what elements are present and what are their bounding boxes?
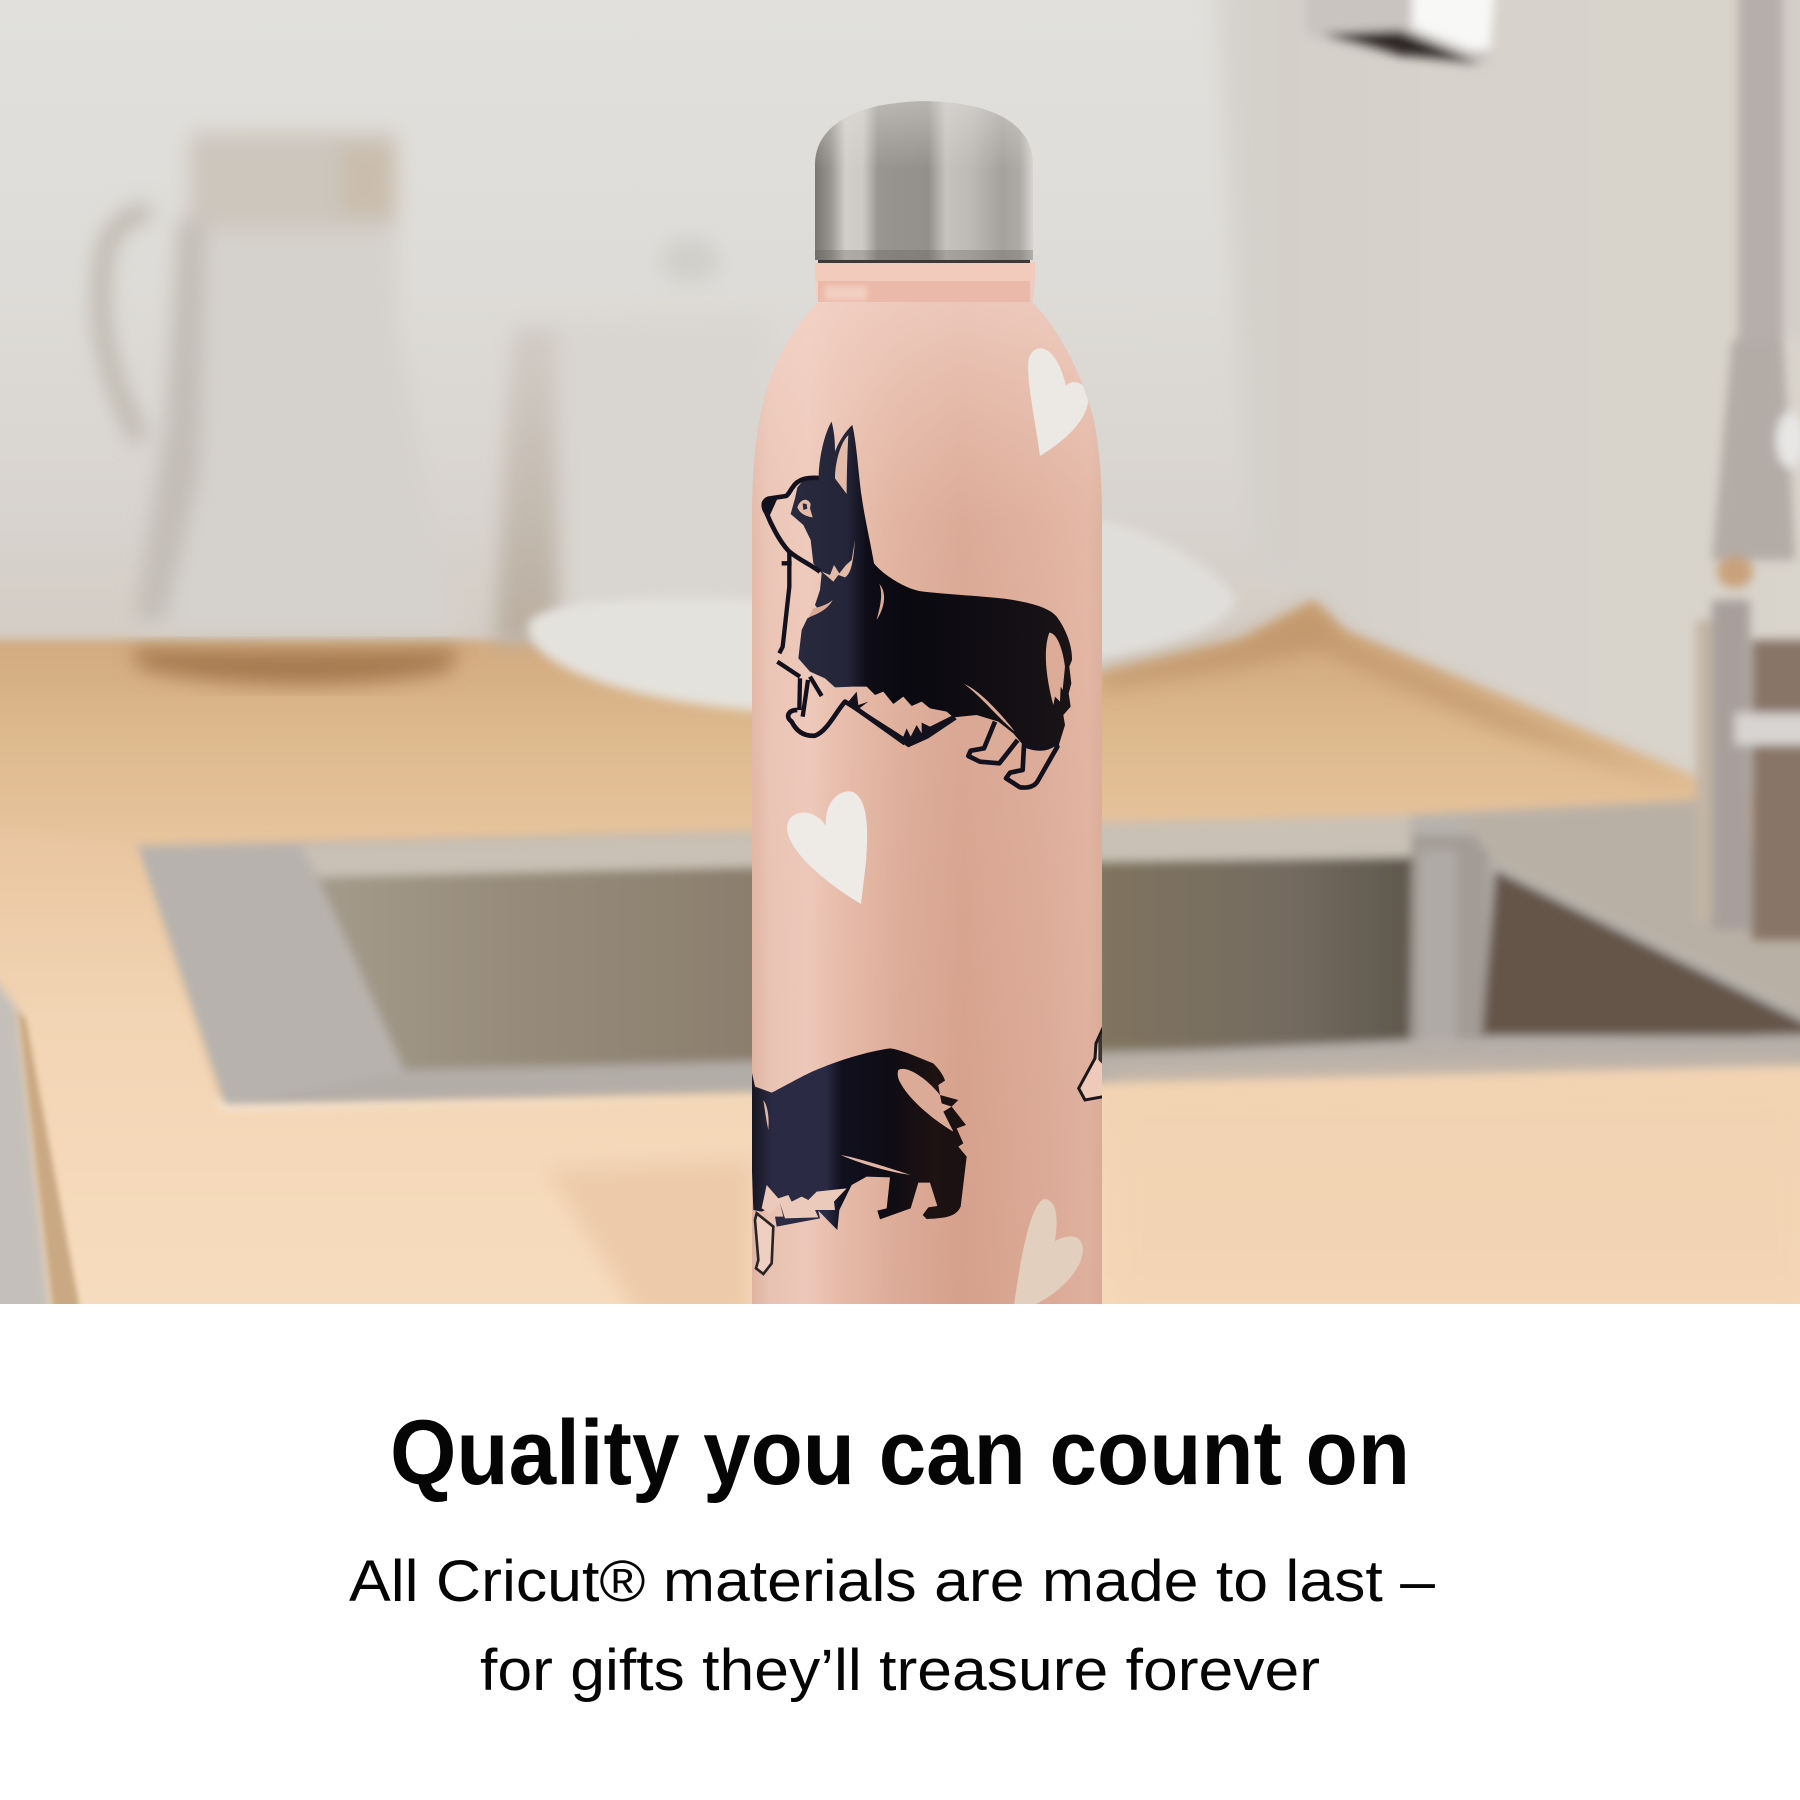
panel: kitchen photo — [0, 0, 1800, 1320]
divider — [1410, 835, 1490, 1040]
sink — [135, 800, 1800, 1107]
back wall — [0, 0, 1488, 688]
counter dark edge — [18, 1010, 82, 1320]
bottle cap — [815, 101, 1033, 260]
heart top right — [1028, 348, 1088, 456]
cap bottom edge — [815, 250, 1033, 260]
front wood — [0, 830, 1800, 1320]
cap top sheen — [815, 101, 1033, 172]
belly fur — [762, 1185, 847, 1218]
blurred kitchen background — [0, 0, 1800, 1320]
wood darker patch — [559, 1162, 752, 1304]
nose — [762, 497, 778, 515]
heart bottom right — [1014, 1199, 1083, 1305]
right wall — [1218, 0, 1800, 772]
left basin — [318, 866, 800, 1072]
bottle artwork — [751, 348, 1107, 1305]
sink deck — [135, 800, 1800, 1107]
shoulder patches — [877, 584, 884, 620]
faucet — [1696, 0, 1800, 940]
counter side edge — [0, 960, 52, 1320]
body silhouette — [791, 422, 1072, 753]
body text — [349, 1549, 1436, 1703]
eye patch — [797, 500, 813, 517]
white jug — [84, 126, 406, 618]
white container — [488, 325, 586, 650]
water bottle — [751, 101, 1107, 1305]
bottle neck ring — [815, 263, 1035, 282]
body silhouette — [751, 1048, 967, 1230]
paw — [755, 1213, 773, 1274]
front paw and belly line — [788, 702, 905, 743]
bottom rim — [464, 1030, 1800, 1072]
wooden counter back — [0, 600, 1800, 1100]
sink rim back — [300, 815, 1410, 877]
neck shade — [818, 281, 1030, 302]
corgi bottom — [751, 1048, 967, 1274]
hind leg far — [1006, 743, 1057, 788]
right deck — [1476, 808, 1690, 850]
body line 1: All Cricut® materials are made to last – — [349, 1549, 1436, 1614]
tail patch — [898, 1069, 953, 1132]
neck highlight — [825, 286, 867, 300]
heart middle left — [787, 791, 867, 904]
cheek fur — [822, 540, 855, 582]
white plate left — [528, 598, 770, 712]
face mark — [1098, 1020, 1107, 1068]
bottle highlight — [752, 262, 1102, 1304]
tail patch — [1046, 633, 1065, 705]
counter corner shadow — [1102, 600, 1634, 768]
wood right tint — [1100, 1066, 1800, 1320]
shoulder mark — [763, 1100, 769, 1130]
jug shadow — [132, 648, 458, 685]
bottle body — [752, 262, 1102, 1304]
belly slit — [841, 1155, 911, 1175]
hind leg near — [968, 722, 1018, 763]
corgi top — [762, 422, 1072, 788]
chest line — [777, 552, 822, 717]
corgi right edge head — [1079, 1020, 1107, 1100]
lamp — [1305, 0, 1495, 66]
ear inner — [835, 435, 848, 494]
belly slit — [964, 684, 1015, 732]
middle basin — [1102, 852, 1418, 1058]
cap seam — [818, 260, 1030, 263]
body line 2: for gifts they’ll treasure forever — [480, 1638, 1320, 1703]
head outline — [764, 478, 820, 572]
white plate right — [1102, 522, 1235, 660]
right basin — [1482, 870, 1800, 1036]
grey wall smudge — [664, 240, 715, 278]
heading: Quality you can count on — [390, 1402, 1410, 1504]
